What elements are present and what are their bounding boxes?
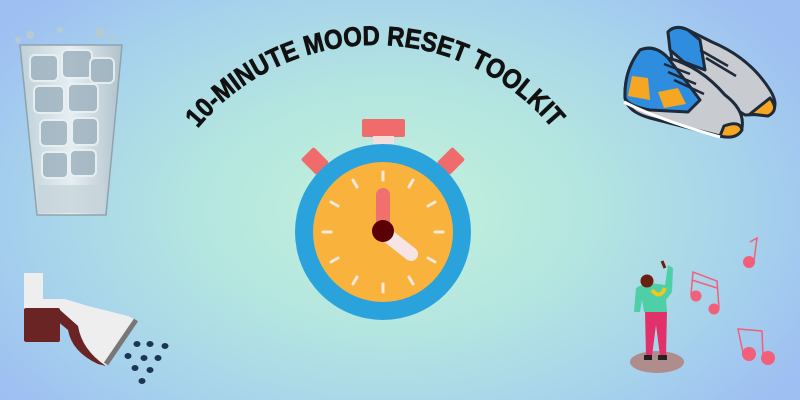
title: 10-MINUTE MOOD RESET TOOLKIT	[186, 26, 567, 128]
icon: sneakers	[624, 27, 775, 137]
icon: stopwatch	[295, 119, 471, 320]
icon: glass of ice water	[15, 27, 122, 215]
icon: music notes	[690, 238, 775, 365]
icon: shower head	[24, 273, 168, 384]
icon: dancing person	[630, 261, 684, 373]
